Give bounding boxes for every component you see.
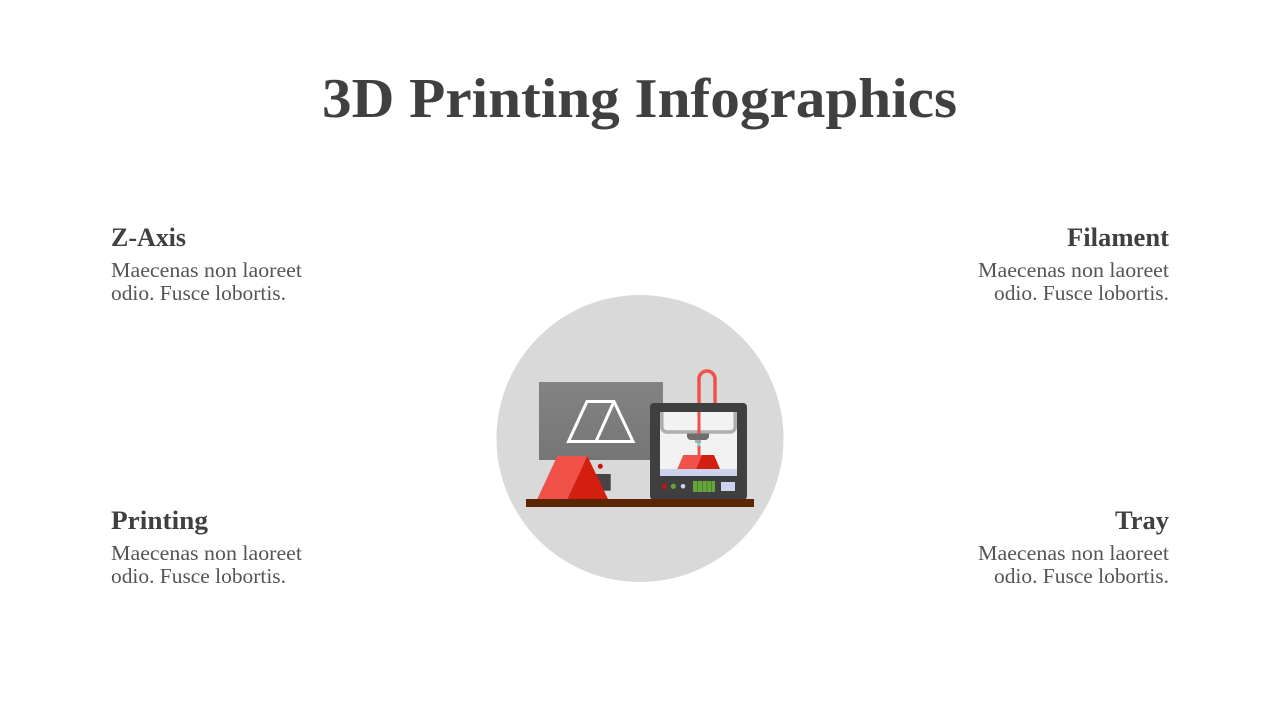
icon: 3D printer	[650, 403, 747, 500]
central illustration: 3D printer in circle	[496, 295, 784, 582]
text block: Z-Axis: Maecenas non laoreet	[111, 258, 302, 282]
tray shelf	[526, 499, 754, 507]
text block: Tray: Tray	[1115, 506, 1169, 535]
text block: Filament: odio. Fusce lobortis.	[994, 281, 1169, 305]
text block: Filament: Filament	[1067, 223, 1169, 252]
text block: Printing: Maecenas non laoreet	[111, 541, 302, 565]
icon: monitor	[539, 382, 663, 460]
icon: printed red prism	[537, 456, 608, 499]
text block: Filament: Maecenas non laoreet	[978, 258, 1169, 282]
text block: Printing: Printing	[111, 506, 208, 535]
text block: Tray: Maecenas non laoreet	[978, 541, 1169, 565]
background circle	[496, 295, 784, 582]
text block: Printing	[111, 506, 302, 588]
icon: small block and dot	[596, 464, 611, 491]
text block: Z-Axis: Z-Axis	[111, 223, 186, 252]
text block: Z-Axis: odio. Fusce lobortis.	[111, 281, 286, 305]
text block: Filament	[978, 223, 1169, 305]
text block: Tray: odio. Fusce lobortis.	[994, 564, 1169, 588]
text block: Tray	[978, 506, 1169, 588]
icon: filament tube	[699, 371, 715, 405]
text block: Printing: odio. Fusce lobortis.	[111, 564, 286, 588]
text block: Z-Axis	[111, 223, 302, 305]
title: 3D Printing Infographics	[322, 68, 957, 130]
